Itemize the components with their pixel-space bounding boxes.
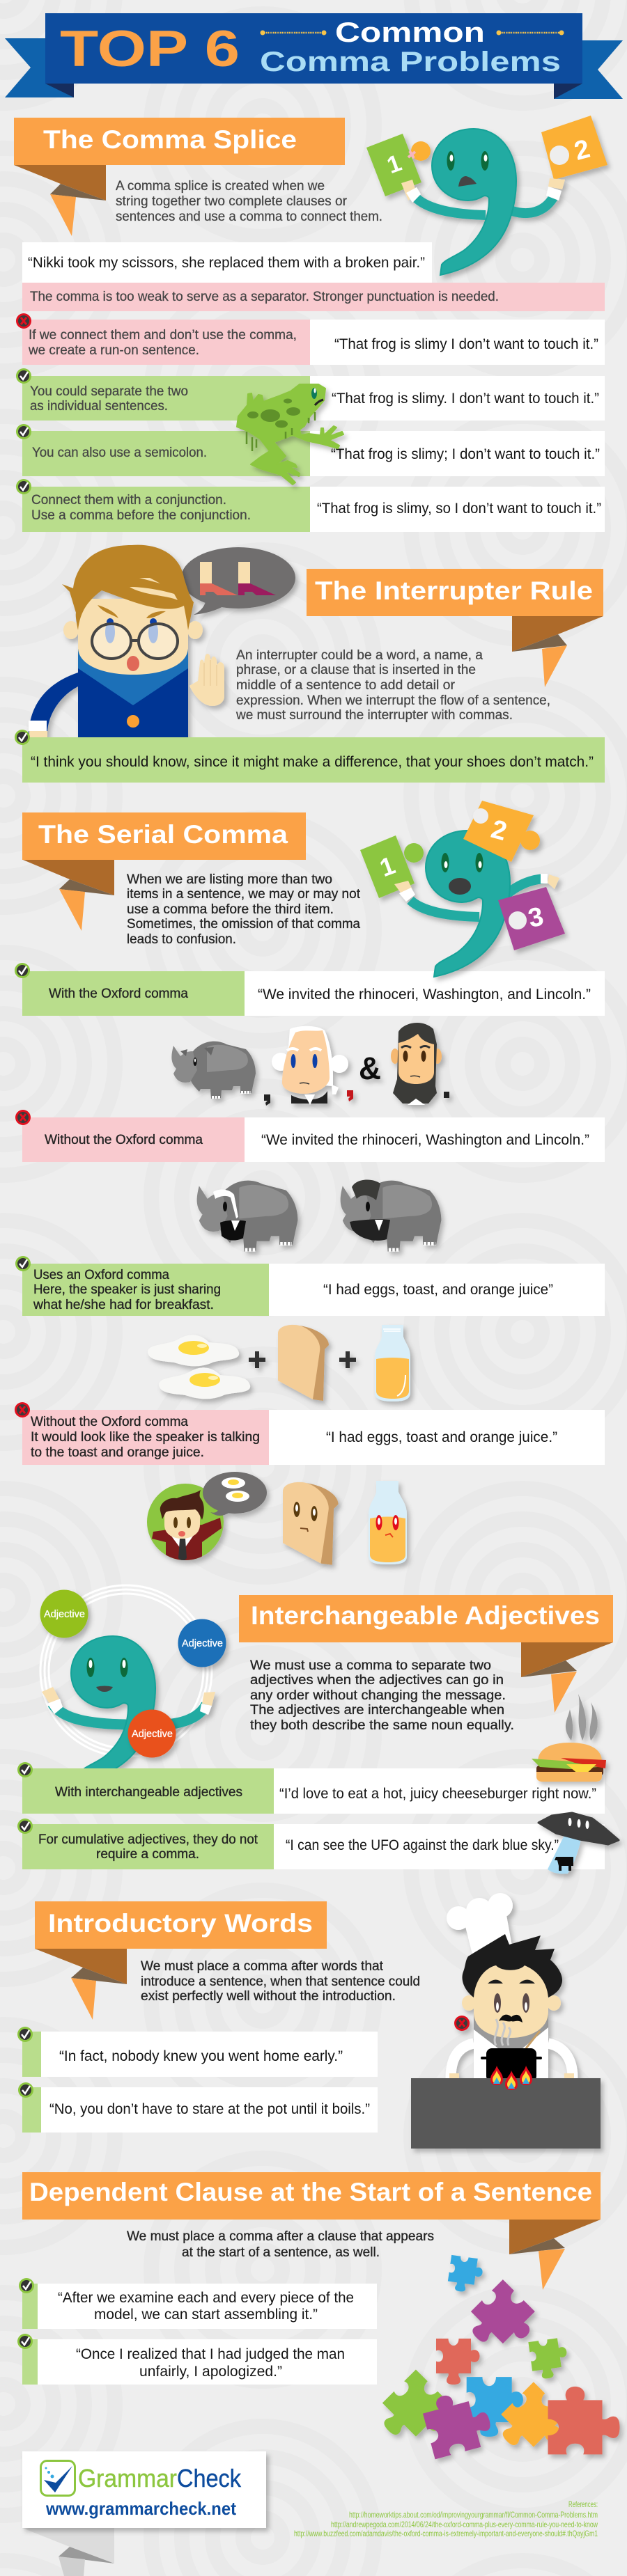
- row: with interchangeable adjectives: “I’d love to eat a hot, juicy cheeseburger right now.”: [279, 1786, 596, 1802]
- text: interchangeable adjectives definition: any order without changing the message.: [250, 1688, 506, 1703]
- icon: fried eggs: [148, 1335, 250, 1399]
- row: in fact: “In fact, nobody knew you went home early.”: [59, 2048, 343, 2064]
- punctuation: black comma: [264, 1094, 270, 1106]
- icon: correct mark: [15, 730, 30, 745]
- icon: comma character: [42, 1636, 215, 1782]
- text: interchangeable adjectives definition: [250, 1658, 514, 1733]
- pink note bar: The comma is too weak to serve as a separator. Stronger punctuation is needed.: [30, 290, 499, 304]
- pot with spoon and steam: [481, 2019, 542, 2082]
- icon: toast: [278, 1325, 329, 1401]
- icon: speech bubble with mismatched shoes: [181, 547, 295, 615]
- icon: boy with glasses raising his hand: [29, 545, 224, 737]
- heading: the serial comma: [22, 812, 306, 931]
- row: once I realized: “Once I realized that I had judged the man: [76, 2346, 345, 2362]
- title banner: Common: [335, 17, 485, 48]
- operator: plus: [339, 1351, 356, 1368]
- row: uses an Oxford comma: Here, the speaker is just sharing: [33, 1282, 221, 1297]
- icon: comma character with puzzle pieces 1, 2, 3: [360, 801, 565, 977]
- illustration: jigsaw puzzle pieces: [371, 2255, 619, 2465]
- row: no, you don't: [22, 2087, 378, 2133]
- text: interrupter definition: middle of a sentence to add detail or: [236, 678, 456, 693]
- heading: the serial comma: The Serial Comma: [38, 820, 288, 849]
- juggling rings: [40, 1585, 212, 1757]
- icon: bottle of orange juice: [375, 1325, 410, 1401]
- text: introductory words definition: exist perfectly well without the introduction.: [141, 1989, 396, 2004]
- quote bar: shoes: [22, 737, 605, 783]
- icon: correct mark: [18, 2082, 33, 2098]
- row: with the Oxford comma: “We invited the rhinoceri, Washington, and Lincoln.”: [258, 987, 591, 1003]
- text: introductory words definition: [141, 1959, 420, 2004]
- icon: rhinoceros: [171, 1042, 256, 1099]
- heading: interchangeable adjectives: Interchangeable Adjectives: [251, 1601, 600, 1630]
- heading: the interrupter rule: The Interrupter Rule: [315, 576, 593, 605]
- text: dependent clause definition: [127, 2229, 434, 2260]
- row: run-on sentence: “That frog is slimy I don’t want to touch it.”: [334, 336, 598, 352]
- row: cumulative adjectives: require a comma.: [96, 1847, 199, 1862]
- icon: correct mark: [15, 1256, 31, 1271]
- icon: comma character with puzzle pieces 1, 2, 3: 2: [488, 815, 510, 847]
- circle: adjective orange: Adjective: [132, 1728, 173, 1740]
- icon: Abraham Lincoln: [391, 1023, 442, 1105]
- heading: interchangeable adjectives: [239, 1595, 613, 1713]
- row: conjunction: [22, 487, 605, 532]
- text: serial comma definition: When we are listing more than two: [127, 872, 332, 887]
- row: with interchangeable adjectives: With interchangeable adjectives: [55, 1785, 242, 1800]
- icon: wrong mark: [15, 1110, 31, 1125]
- row: in fact: [22, 2032, 378, 2077]
- icon: man in green circle: [147, 1484, 224, 1563]
- icon: frog: [237, 384, 343, 485]
- chef head: [462, 1934, 562, 2038]
- illustration: speaker talking to toast and juice: [147, 1472, 407, 1565]
- logo: GrammarCheck: [22, 2451, 266, 2576]
- text: references: References:: [568, 2499, 598, 2509]
- operator: plus: [249, 1351, 265, 1368]
- row: uses an Oxford comma: Uses an Oxford comma: [33, 1268, 169, 1282]
- title banner: [5, 13, 623, 99]
- icon: correct mark: [19, 2278, 34, 2293]
- icon: thought bubble with eggs: [203, 1472, 267, 1516]
- text: comma splice definition: string together two complete clauses or: [116, 194, 348, 209]
- row: uses an Oxford comma: “I had eggs, toast, and orange juice”: [323, 1282, 553, 1298]
- illustration: rhinos dressed as Washington and Lincoln: [197, 1180, 441, 1252]
- text: interchangeable adjectives definition: adjectives when the adjectives can go in: [250, 1673, 504, 1688]
- text: interrupter definition: An interrupter could be a word, a name, a: [236, 648, 483, 663]
- icon: comma character with puzzle pieces 1, 2, 3: 3: [526, 902, 546, 934]
- icon: juice bottle with face: [369, 1481, 407, 1564]
- heading: dependent clause: Dependent Clause at the Start of a Sentence: [29, 2178, 592, 2206]
- icon: comma character with puzzle pieces 1 and 2: 2: [571, 134, 593, 166]
- heading: dependent clause: [22, 2172, 601, 2290]
- row: after we examine: model, we can start assembling it.”: [94, 2307, 318, 2323]
- row: cumulative adjectives: “I can see the UFO against the dark blue sky.”: [286, 1837, 559, 1853]
- row: run-on sentence: If we connect them and don’t use the comma,: [29, 328, 297, 343]
- icon: chef cooking at a stove: [411, 1893, 601, 2149]
- illustration: comma juggling adjectives: [40, 1585, 226, 1782]
- row: cumulative adjectives: For cumulative adjectives, they do not: [38, 1832, 258, 1847]
- row: uses an Oxford comma: what he/she had for breakfast.: [33, 1298, 214, 1312]
- circle: adjective orange: [128, 1710, 176, 1757]
- text: serial comma definition: leads to confusion.: [127, 932, 236, 947]
- text: interrupter definition: expression. When we interrupt the flow of a sentence,: [236, 693, 550, 708]
- circle: adjective green: [40, 1590, 88, 1638]
- text: dependent clause definition: at the start of a sentence, as well.: [182, 2245, 380, 2260]
- icon: wrong mark: [15, 1402, 30, 1417]
- quote: Nikki: [22, 242, 432, 283]
- title banner: TOP 6: [60, 21, 240, 77]
- row: without the Oxford comma, breakfast: to the toast and orange juice.: [31, 1445, 204, 1460]
- row: semicolon: “That frog is slimy; I don’t want to touch it.”: [331, 446, 600, 462]
- icon: correct mark: [17, 2027, 33, 2042]
- punctuation: red comma: [347, 1090, 353, 1101]
- row: cumulative adjectives: [22, 1824, 605, 1869]
- row: with interchangeable adjectives: [22, 1768, 605, 1814]
- icon: correct mark: [16, 479, 31, 494]
- row: with the Oxford comma: With the Oxford comma: [49, 987, 188, 1001]
- row: run-on sentence: we create a run-on sentence.: [28, 343, 199, 358]
- text: comma splice definition: sentences and use a comma to connect them.: [116, 210, 382, 224]
- icon: comma character with puzzle pieces 1 and 2: 1: [384, 150, 405, 179]
- text: interchangeable adjectives definition: The adjectives are interchangeable when: [250, 1703, 504, 1718]
- text: interchangeable adjectives definition: they both describe the same noun equally.: [250, 1718, 514, 1733]
- row: no, you don't: “No, you don’t have to stare at the pot until it boils.”: [49, 2101, 370, 2117]
- quote bar: shoes: “I think you should know, since it might make a difference, that your shoes don’t match.”: [31, 754, 594, 770]
- logo: GrammarCheck: www.grammarcheck.net: [45, 2498, 236, 2519]
- text: comma splice definition: [116, 179, 382, 224]
- stove: [411, 2078, 601, 2149]
- logo: GrammarCheck: Grammar: [78, 2464, 177, 2492]
- quote: Nikki: “Nikki took my scissors, she replaced them with a broken pair.”: [28, 255, 425, 271]
- icon: wrong mark by the chef: [454, 2016, 470, 2031]
- circle: adjective blue: Adjective: [182, 1638, 223, 1649]
- heading: introductory words: Introductory Words: [48, 1909, 313, 1938]
- illustration: rhino, Washington and Lincoln: [171, 1023, 449, 1106]
- text: serial comma definition: Sometimes, the omission of that comma: [127, 917, 360, 932]
- row: without the Oxford comma: Without the Oxford comma: [45, 1133, 203, 1147]
- row: once I realized: unfairly, I apologized.”: [139, 2364, 282, 2380]
- row: without the Oxford comma, breakfast: [22, 1410, 605, 1465]
- punctuation: period: [444, 1092, 449, 1098]
- heading: the comma splice: [14, 118, 345, 236]
- chef hat: [447, 1893, 513, 1960]
- text: serial comma definition: use a comma before the third item.: [127, 902, 334, 917]
- chef arms and body: [449, 2012, 574, 2079]
- heading: the interrupter rule: [307, 569, 603, 687]
- title banner: Comma Problems: [260, 47, 561, 77]
- text: serial comma definition: [127, 872, 361, 947]
- icon: correct mark: [15, 963, 30, 978]
- circle: adjective blue: [178, 1619, 226, 1667]
- text: serial comma definition: items in a sentence, we may or may not: [127, 887, 361, 902]
- heading: introductory words: [35, 1901, 327, 2020]
- icon: steaming cheeseburger: [532, 1694, 606, 1782]
- row: without the Oxford comma: [22, 1117, 605, 1162]
- row: conjunction: Connect them with a conjunction.: [31, 493, 226, 508]
- row: uses an Oxford comma: [22, 1264, 605, 1316]
- icon: correct mark: [17, 1762, 33, 1777]
- icon: correct mark: [17, 2334, 33, 2349]
- logo: GrammarCheck: Check: [177, 2464, 242, 2492]
- row: after we examine: “After we examine each and every piece of the: [58, 2290, 354, 2306]
- row: separate sentences: as individual sentences.: [30, 399, 168, 414]
- row: without the Oxford comma, breakfast: Without the Oxford comma: [31, 1415, 188, 1429]
- text: ampersand: &: [359, 1051, 381, 1086]
- pink note bar: [22, 283, 605, 311]
- icon: comma character with puzzle pieces 1 and 2: [366, 116, 607, 275]
- row: separate sentences: [22, 376, 605, 421]
- icon: correct mark: [16, 368, 31, 384]
- heading: the comma splice: The Comma Splice: [43, 125, 297, 154]
- text: interrupter definition: phrase, or a clause that is inserted in the: [236, 663, 476, 677]
- text: dependent clause definition: We must place a comma after a clause that appears: [127, 2229, 434, 2244]
- row: separate sentences: “That frog is slimy. I don’t want to touch it.”: [332, 391, 599, 407]
- icon: wrong mark: [16, 313, 31, 329]
- text: introductory words definition: We must place a comma after words that: [141, 1959, 384, 1974]
- row: semicolon: You can also use a semicolon.: [32, 446, 207, 460]
- icon: UFO abducting a cow: [539, 1813, 619, 1874]
- text: interchangeable adjectives definition: We must use a comma to separate two: [250, 1658, 491, 1673]
- row: run-on sentence: [22, 320, 605, 365]
- text: introductory words definition: introduce a sentence, when that sentence could: [141, 1974, 420, 1989]
- row: without the Oxford comma, breakfast: “I had eggs, toast and orange juice.”: [326, 1429, 557, 1445]
- icon: George Washington: [272, 1026, 348, 1105]
- text: interrupter definition: we must surround the interrupter with commas.: [235, 708, 513, 723]
- row: conjunction: Use a comma before the conjunction.: [31, 508, 251, 523]
- row: conjunction: “That frog is slimy, so I don’t want to touch it.”: [317, 501, 601, 517]
- row: without the Oxford comma: “We invited the rhinoceri, Washington and Lincoln.”: [261, 1132, 589, 1148]
- icon: toast with face: [283, 1482, 339, 1565]
- row: once I realized: [22, 2339, 377, 2385]
- icon: comma character with puzzle pieces 1, 2, 3: 1: [376, 851, 398, 882]
- row: semicolon: [22, 431, 605, 476]
- row: with the Oxford comma: [22, 971, 605, 1016]
- icon: correct mark: [16, 424, 31, 439]
- text: comma splice definition: A comma splice is created when we: [116, 179, 325, 194]
- flames: [490, 2066, 532, 2090]
- row: separate sentences: You could separate the two: [30, 384, 188, 399]
- icon: correct mark: [17, 1819, 33, 1834]
- circle: adjective green: Adjective: [44, 1608, 85, 1620]
- text: references: [294, 2499, 598, 2538]
- row: after we examine: [22, 2284, 377, 2329]
- row: without the Oxford comma, breakfast: It would look like the speaker is talking: [31, 1430, 260, 1445]
- text: interrupter definition: [235, 648, 550, 723]
- illustration: eggs plus toast plus juice: [148, 1325, 410, 1401]
